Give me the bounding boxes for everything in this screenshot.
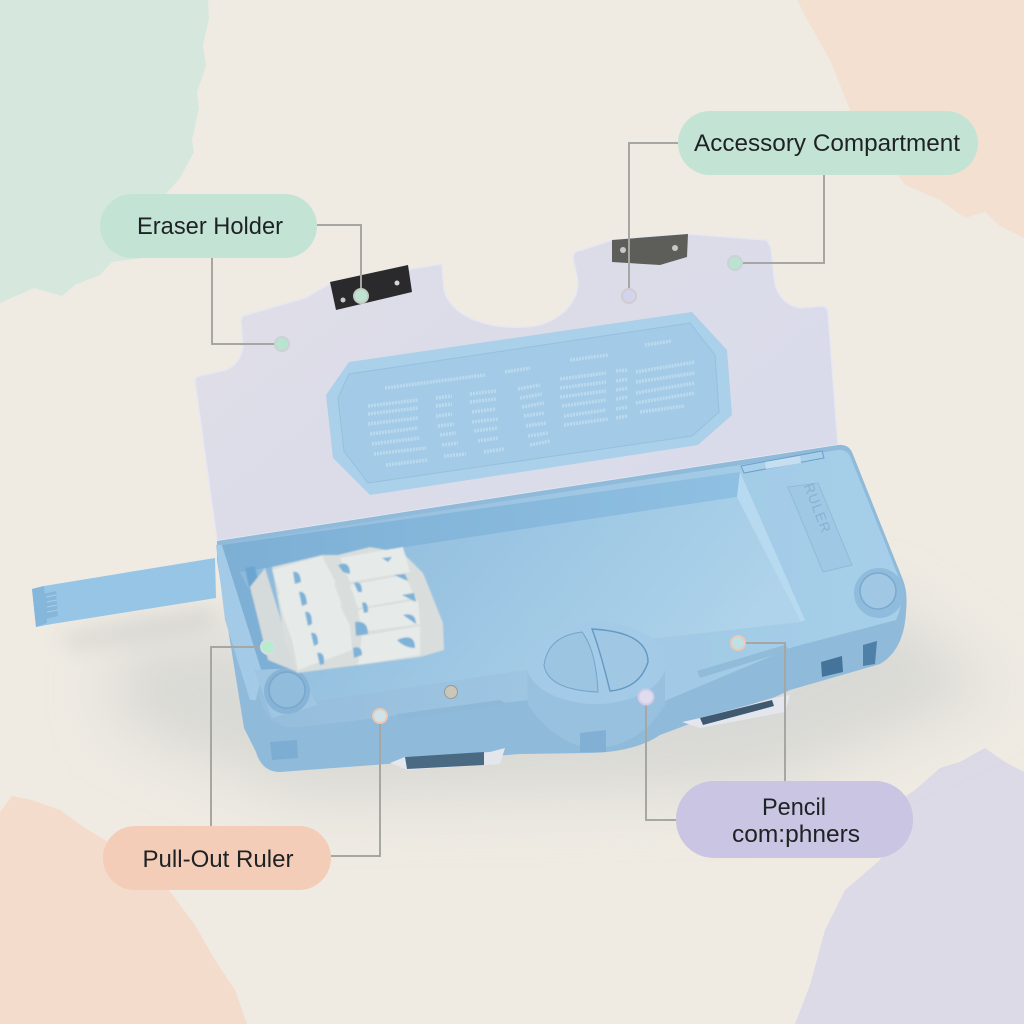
right corner button	[854, 568, 904, 618]
right compartment wall	[737, 472, 805, 622]
magnet	[444, 686, 458, 698]
callout: Accessory Compartment: Accessory Compartment	[694, 130, 960, 157]
left metal clip	[330, 265, 412, 310]
dot: pencil sharpeners dial	[638, 690, 654, 704]
ruler label: RULER	[801, 481, 835, 536]
callout: Eraser Holder	[100, 194, 317, 258]
callout: Pull-Out Ruler: Pull-Out Ruler	[142, 846, 294, 873]
open lid	[195, 234, 840, 548]
callout dots	[261, 256, 745, 723]
tray floor	[240, 497, 801, 701]
case tray	[216, 445, 907, 772]
callout: Accessory Compartment	[678, 111, 978, 175]
top rim	[217, 450, 902, 727]
lid bottom highlight	[217, 445, 840, 548]
dot: eraser holder lid	[275, 337, 289, 351]
embossed chart panel	[326, 312, 732, 495]
right metal clip	[612, 234, 688, 265]
inner left	[222, 545, 300, 690]
embossed chart lines	[368, 341, 695, 465]
ruler slider	[741, 451, 824, 473]
brush patch: bottom-right lavender	[795, 748, 1024, 1024]
side ports	[821, 656, 843, 677]
dot: accessory compartment lid	[728, 256, 742, 270]
callout: Pencil sharpeners	[676, 781, 913, 858]
dot: eraser holder top	[354, 289, 368, 303]
ruler label	[788, 481, 852, 572]
front finger slots	[397, 700, 506, 720]
back wall	[222, 472, 740, 572]
dot: pull-out ruler rim	[373, 709, 387, 723]
dial left half	[544, 632, 598, 692]
soft floor shadow	[110, 600, 1000, 800]
dot: accessory compartment clip	[622, 289, 636, 303]
insert openings	[293, 557, 416, 665]
outer body	[217, 445, 907, 772]
callout: Pull-Out Ruler	[103, 826, 331, 890]
callout: Pencil sharpeners: Pencil	[762, 794, 826, 821]
dial right half	[592, 629, 648, 691]
white sharpener insert	[245, 547, 444, 673]
dot: pencil sharpeners rim	[731, 636, 745, 650]
left wall	[216, 545, 262, 700]
callout leader lines	[211, 143, 824, 856]
center sharpener dial	[526, 622, 666, 748]
left corner button	[254, 668, 318, 718]
pencil case illustration	[32, 234, 907, 772]
brush patch: top-right peach	[797, 0, 1024, 238]
dot: pull-out ruler insert	[261, 640, 275, 654]
callout: Pencil sharpeners: com:phners	[732, 821, 860, 848]
bottom metal latch right	[682, 695, 790, 728]
bottom metal latch left	[390, 748, 505, 770]
brush patch: top-left green	[0, 0, 209, 303]
brush patch: bottom-left peach	[0, 796, 247, 1024]
callout: Eraser Holder: Eraser Holder	[137, 213, 283, 240]
pull-out ruler	[32, 558, 216, 650]
